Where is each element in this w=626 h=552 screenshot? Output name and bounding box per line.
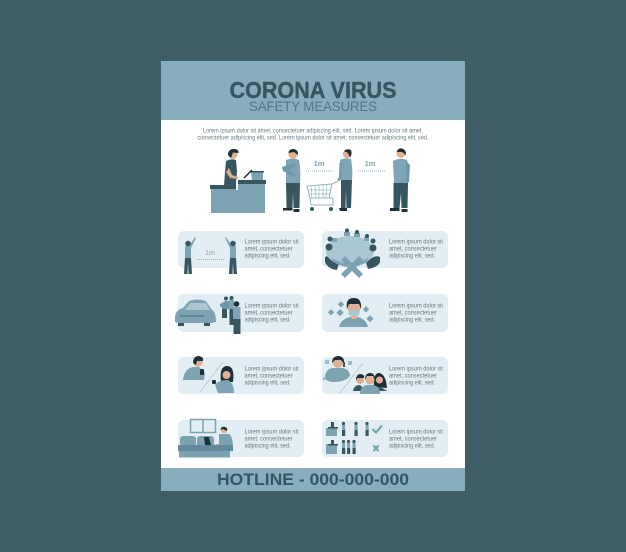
panel text: adipiscing elit, sed. [244,444,291,450]
icon: masked person and viruses [328,298,374,327]
icon: check mark [372,426,382,432]
header band [161,61,465,120]
poster sheet [161,61,465,491]
panel text: Lorem ipsum dolor sit [244,430,299,436]
panel text: adipiscing elit, sed. [389,318,435,324]
panel text [389,366,443,386]
panel text: adipiscing elit, sed. [389,380,435,386]
cashier [224,149,239,186]
customer arms crossed [282,149,300,212]
panel text: Lorem ipsum dolor sit [244,366,299,372]
icon: cross mark [374,446,378,451]
panel text: adipiscing elit, sed. [244,254,291,260]
distance label 1m: 1m [314,159,325,168]
shopping cart [307,180,340,211]
footer hotline band [161,468,465,491]
panel: queue correctly [322,420,448,457]
waiting customer [390,148,410,212]
panel text [244,366,299,386]
panel: travel and commute [175,294,304,334]
panel: no group meetings [322,228,448,276]
panel text: amet, consectetuer [244,436,292,442]
checkout counter [210,170,266,213]
panel text: Lorem ipsum dolor sit [389,366,443,372]
icon: two people waving 1m apart: 1m [205,250,215,257]
icon: two people on phones [183,356,234,393]
panel: work from home [178,420,304,458]
intro text: consectetuer adipiscing elit, sed. Lorem ipsum dolor sit amet, consectetuer adipiscing elit, sed. [198,136,429,142]
panel text: amet, consectetuer [389,436,437,442]
panel text: Lorem ipsum dolor sit [389,430,443,436]
panel text: Lorem ipsum dolor sit [244,240,299,246]
panel: use phone instead of meeting [178,356,304,394]
icon: crossed out meeting table [325,228,380,276]
title: CORONA VIRUS [230,77,396,103]
illustration: checkout queue with 1m spacing [210,148,410,213]
panel: wear a mask [322,294,448,332]
icon: car and commuters [175,296,240,334]
customer with cart [338,149,352,211]
intro text [198,128,429,142]
distance label 1m: 1m [365,159,376,168]
panel text [244,430,299,450]
panel text: adipiscing elit, sed. [389,444,435,450]
icon: correct and incorrect queue spacing [326,422,382,454]
icon: person on sofa with laptop [178,420,233,458]
panel text: adipiscing elit, sed. [389,254,435,260]
panel text: amet, consectetuer [389,246,437,252]
panel: call for help [322,356,448,394]
subtitle: SAFETY MEASURES [249,98,377,114]
panel text [244,304,299,324]
panel text: amet, consectetuer [244,310,292,316]
panel text: amet, consectetuer [389,310,437,316]
panel text [389,240,443,260]
panel text: adipiscing elit, sed. [244,318,291,324]
panel text [389,304,443,324]
panel text: Lorem ipsum dolor sit [389,240,443,246]
icon: person calling and family [323,356,387,394]
panel text [244,240,299,260]
panel text: Lorem ipsum dolor sit [389,304,443,310]
panel text: amet, consectetuer [244,246,292,252]
panel text [389,430,443,450]
panel text: amet, consectetuer [389,374,437,380]
footer hotline band: HOTLINE - 000-000-000 [217,470,409,489]
panel text: Lorem ipsum dolor sit [244,304,299,310]
intro text: Lorem ipsum dolor sit amet, consectetuer adipiscing elit, sed. Lorem ipsum dolor sit amet, [203,128,423,134]
panel text: adipiscing elit, sed. [244,380,291,386]
panel: keep distance [178,231,304,274]
panel text: amet, consectetuer [244,374,292,380]
